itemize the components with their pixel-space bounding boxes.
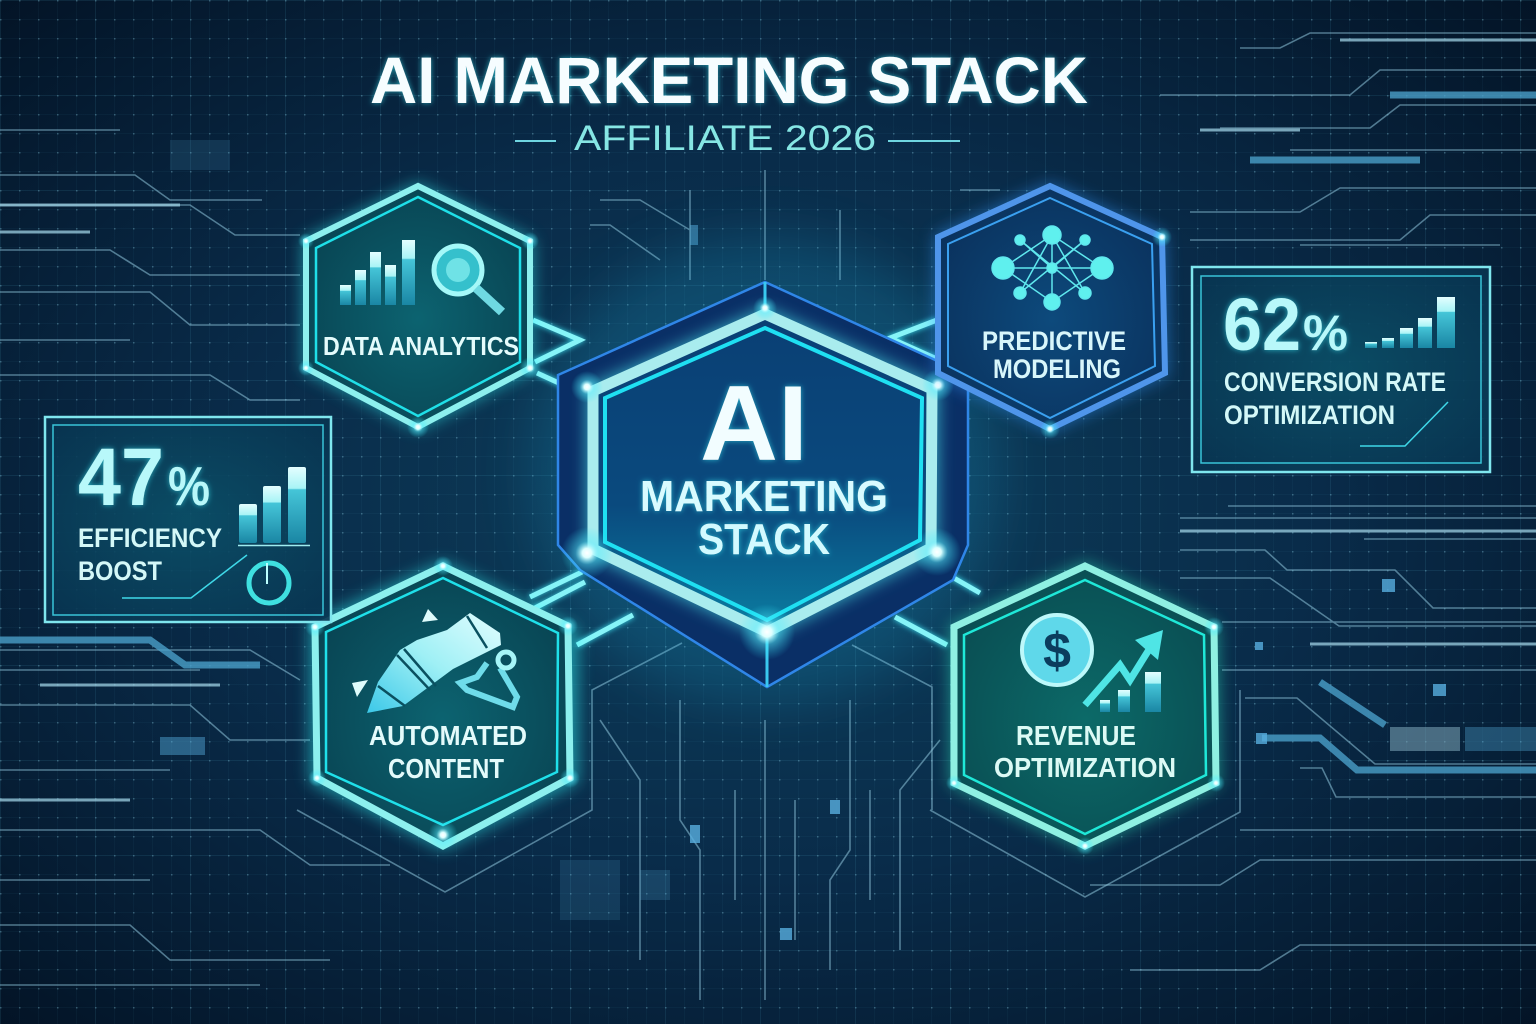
- stat label: [78, 523, 222, 586]
- stat value: [1223, 283, 1348, 366]
- hexagon: Predictive Modeling: [935, 183, 1172, 439]
- icon: bar chart: [340, 240, 415, 305]
- icon: magnifier: [434, 246, 502, 312]
- stat value: %: [168, 455, 210, 517]
- subtitle: AFFILIATE 2026: [574, 119, 876, 158]
- stat value: [78, 432, 210, 523]
- connectors between hexagons: [530, 320, 980, 645]
- central label: [640, 363, 888, 564]
- stat label: EFFICIENCY: [78, 523, 222, 553]
- icon: dollar coin: $: [1043, 623, 1071, 679]
- title: AI MARKETING STACK: [370, 43, 1088, 117]
- icon: neural network: [992, 226, 1113, 310]
- label: DATA ANALYTICS: [323, 331, 519, 361]
- hexagon: Data Analytics: [298, 183, 541, 438]
- panel: 62% conversion rate: [1192, 267, 1490, 472]
- stat value: 47: [78, 432, 164, 523]
- stat value: %: [1303, 305, 1348, 361]
- central glow: [530, 235, 1000, 705]
- hexagon: central AI Marketing Stack: [558, 282, 968, 687]
- label: AUTOMATED: [369, 720, 527, 751]
- stat value: 62: [1223, 283, 1301, 366]
- label: MODELING: [993, 354, 1121, 384]
- label: [994, 720, 1176, 783]
- label: [982, 326, 1126, 384]
- label: REVENUE: [1016, 720, 1136, 751]
- stat label: CONVERSION RATE: [1224, 367, 1446, 397]
- stat label: BOOST: [78, 556, 162, 586]
- icon: growth arrow and bars: [1085, 630, 1163, 712]
- central label: STACK: [698, 515, 830, 564]
- stat label: [1224, 367, 1446, 430]
- central label: MARKETING: [640, 472, 888, 521]
- icon: rocket: [352, 609, 517, 713]
- label: PREDICTIVE: [982, 326, 1126, 356]
- icon: dollar coin: [1022, 615, 1092, 685]
- label: CONTENT: [388, 753, 504, 784]
- icon: bars: [1365, 297, 1455, 348]
- stat label: OPTIMIZATION: [1224, 400, 1395, 430]
- hexagon: Revenue Optimization: [946, 562, 1225, 855]
- label: OPTIMIZATION: [994, 752, 1176, 783]
- central label: AI: [700, 363, 808, 483]
- icon: bars and gauge: [122, 467, 310, 603]
- label: [369, 720, 527, 784]
- panel: 47% efficiency boost: [45, 417, 331, 622]
- hexagon: Automated Content: [305, 556, 580, 850]
